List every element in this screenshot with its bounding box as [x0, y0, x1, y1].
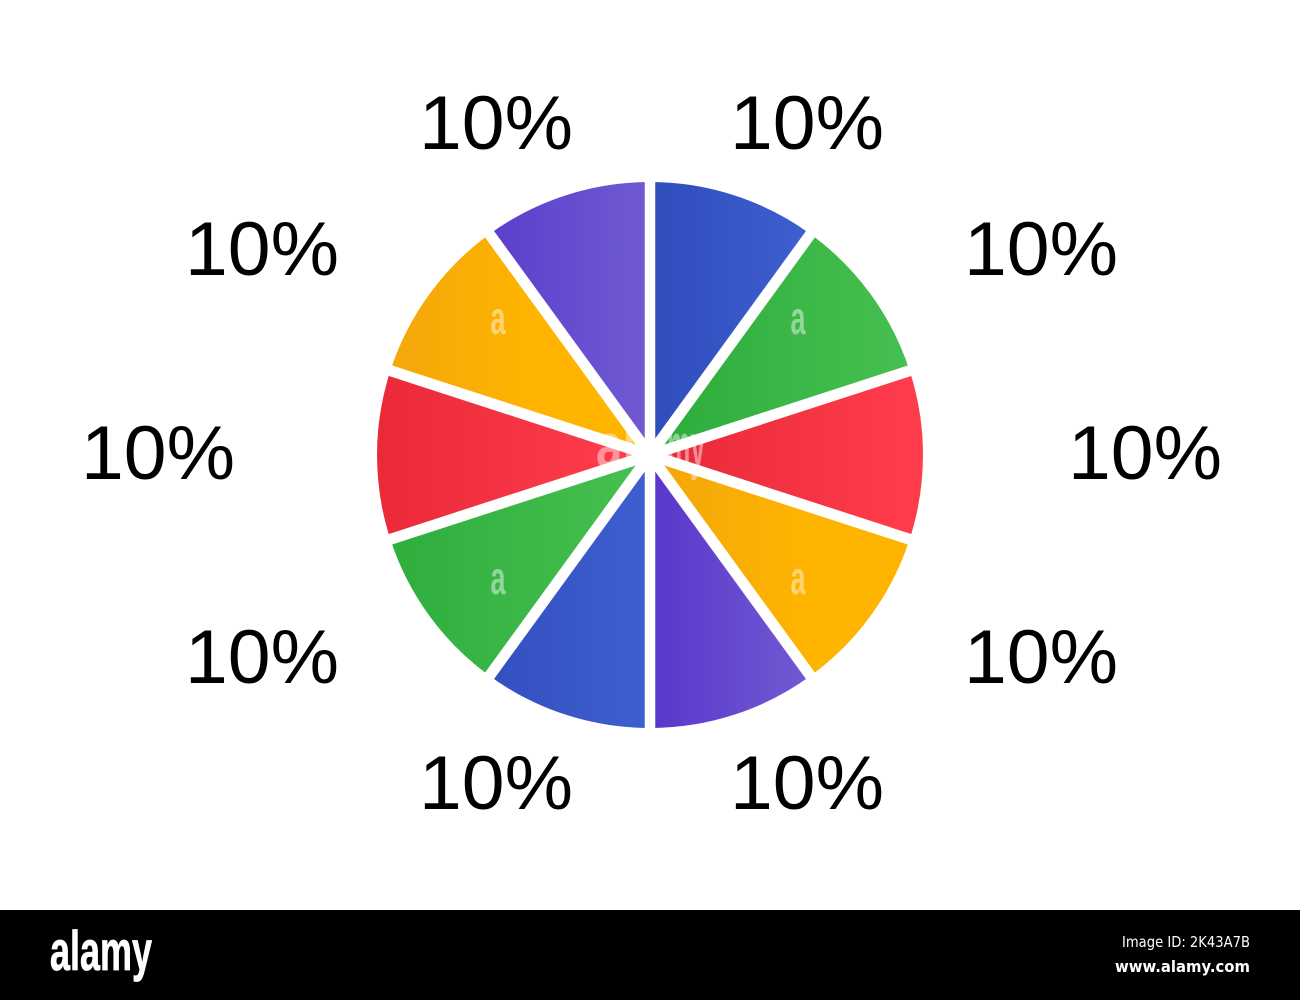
segment dividers: [379, 170, 921, 740]
watermark marks on chart: al: [596, 412, 636, 481]
footer logo: alamy: [50, 919, 152, 982]
segment: red, right: [650, 371, 923, 539]
watermark marks on chart: a: [490, 292, 506, 344]
label: upper right: 10%: [964, 207, 1118, 292]
footer bar: [0, 910, 1300, 1000]
segment: purple, upper left: [490, 182, 650, 455]
segment: blue, lower left: [490, 455, 650, 728]
label: upper left: 10%: [185, 207, 339, 292]
label: lower right: 10%: [964, 615, 1118, 700]
pie chart: [377, 170, 923, 740]
label: left: 10%: [81, 411, 235, 496]
label: top left: 10%: [419, 81, 573, 166]
percentage labels: [81, 81, 1222, 826]
website: www.alamy.com: [1115, 957, 1250, 976]
label: top right: 10%: [730, 81, 884, 166]
label: right: 10%: [1068, 411, 1222, 496]
segment: purple, lower right: [650, 455, 810, 728]
segment: green, upper right: [650, 234, 910, 455]
segment: red, left: [377, 371, 650, 539]
segment: green, lower left: [390, 455, 650, 676]
watermark marks on chart: my: [667, 412, 705, 481]
label: bottom right: 10%: [730, 741, 884, 826]
segment: orange, upper left: [390, 234, 650, 455]
watermark marks on chart: a: [490, 552, 506, 604]
image id: Image ID: 2K43A7B: [1122, 933, 1250, 951]
segment: orange, lower right: [650, 455, 910, 676]
watermark marks on chart: [490, 292, 806, 604]
label: bottom left: 10%: [419, 741, 573, 826]
watermark marks on chart: a: [790, 552, 806, 604]
label: lower left: 10%: [185, 615, 339, 700]
center hub: [633, 438, 667, 472]
watermark marks on chart: a: [790, 292, 806, 344]
segment: blue, upper right: [650, 182, 810, 455]
